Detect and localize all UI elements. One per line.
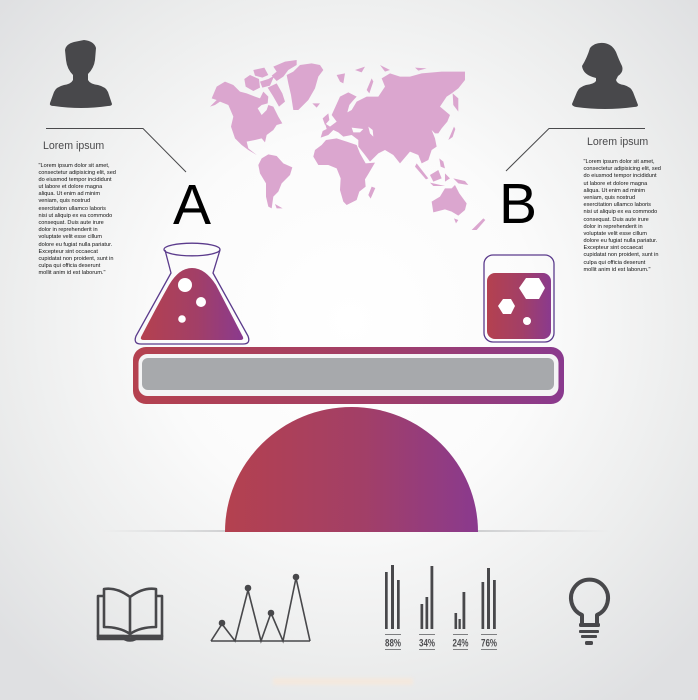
bar chart 76% [481, 568, 497, 650]
icon: mountain line chart [211, 574, 310, 641]
body text right: mollit anim id est laborum." [584, 267, 650, 273]
body text right: do eiusmod tempor incididunt [584, 173, 657, 179]
bar chart 88%: 88% [385, 638, 401, 650]
body text right: veniam, quis nostrud [584, 195, 635, 201]
body text left: voluptate velit esse cillum [38, 234, 102, 240]
body text right: dolore eu fugiat nulla pariatur. [584, 238, 657, 244]
body text right: cupidatat non proident, sunt in [584, 252, 658, 258]
scale fulcrum [225, 407, 478, 532]
body text left: nisi ut aliquip ex ea commodo [38, 213, 112, 219]
body text left: do eiusmod tempor incididunt [38, 177, 112, 183]
body text left: dolor in reprehenderit in [38, 227, 98, 233]
bar chart 34%: 34% [419, 638, 435, 650]
body text right: "Lorem ipsum dolor sit amet, [584, 159, 655, 165]
body text right: voluptate velit esse cillum [584, 231, 647, 237]
body text left: ut labore et dolore magna [38, 184, 102, 190]
body text left: dolore eu fugiat nulla pariatur. [38, 242, 112, 248]
leader line A [46, 128, 186, 172]
icon: woman silhouette [572, 43, 638, 109]
world map [210, 60, 485, 230]
body text left [38, 162, 116, 276]
body text right: Excepteur sint occaecat [584, 245, 643, 251]
body text right: nisi ut aliquip ex ea commodo [584, 209, 657, 215]
body text right: aliqua. Ut enim ad minim [584, 188, 645, 194]
body text left: "Lorem ipsum dolor sit amet, [38, 162, 110, 168]
body text right: consectetur adipisicing elit, sed [584, 166, 661, 172]
body text left: veniam, quis nostrud [38, 198, 90, 204]
icon: man silhouette [50, 40, 112, 108]
bar chart 24%: 24% [452, 638, 469, 650]
leader line B [506, 128, 645, 171]
body text right: dolor in reprehenderit in [584, 224, 643, 230]
heading left: Lorem ipsum [43, 140, 104, 152]
bar chart 76%: 76% [481, 638, 497, 650]
body text left: exercitation ullamco laboris [38, 206, 106, 212]
bar chart 24% [452, 592, 469, 650]
bar chart 34% [419, 566, 435, 650]
body text right: consequat. Duis aute irure [584, 216, 649, 222]
heading right: Lorem ipsum [587, 136, 648, 148]
body text right: exercitation ullamco laboris [584, 202, 651, 208]
body text left: mollit anim id est laborum." [38, 270, 105, 276]
body text right: ut labore et dolore magna [584, 181, 647, 187]
body text left: consequat. Duis aute irure [38, 220, 104, 226]
icon: light bulb [571, 580, 608, 645]
body text left: Excepteur sint occaecat [38, 249, 98, 255]
body text right [584, 159, 661, 273]
bar chart 88% [385, 565, 401, 650]
letter B: B [499, 172, 537, 236]
scale beam [133, 347, 564, 404]
icon: book [98, 589, 162, 640]
beaker B [484, 255, 554, 342]
body text left: consectetur adipisicing elit, sed [38, 170, 116, 176]
flask A [135, 243, 249, 344]
body text left: culpa qui officia deserunt [38, 263, 100, 269]
body text left: aliqua. Ut enim ad minim [38, 191, 100, 197]
body text left: cupidatat non proident, sunt in [38, 256, 113, 262]
body text right: culpa qui officia deserunt [584, 260, 645, 266]
letter A: A [173, 173, 211, 237]
